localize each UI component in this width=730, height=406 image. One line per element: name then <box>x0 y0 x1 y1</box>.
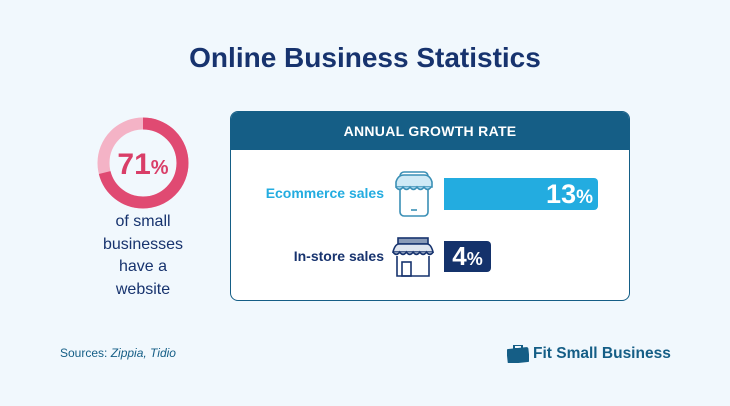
bar: ecommerce 13% <box>444 178 598 210</box>
label: ecommerce: Ecommerce sales <box>266 185 384 201</box>
bar: in-store 4%: 4% <box>452 241 483 271</box>
donut chart: 71% <box>117 148 169 181</box>
title: Online Business Statistics <box>189 42 541 73</box>
panel header: ANNUAL GROWTH RATE <box>344 123 516 139</box>
icon: phone store <box>395 171 433 217</box>
icon: storefront <box>392 237 434 277</box>
panel header <box>231 112 629 150</box>
logo: Fit Small Business <box>533 345 671 362</box>
bar: in-store 4% <box>444 241 491 272</box>
donut chart <box>98 118 188 208</box>
panel: annual growth rate <box>230 111 630 301</box>
bar: ecommerce 13%: 13% <box>546 179 593 209</box>
donut caption: of small businesses have a website <box>103 213 183 298</box>
label: in-store: In-store sales <box>294 248 384 264</box>
sources: Sources: Zippia, Tidio <box>60 346 176 360</box>
